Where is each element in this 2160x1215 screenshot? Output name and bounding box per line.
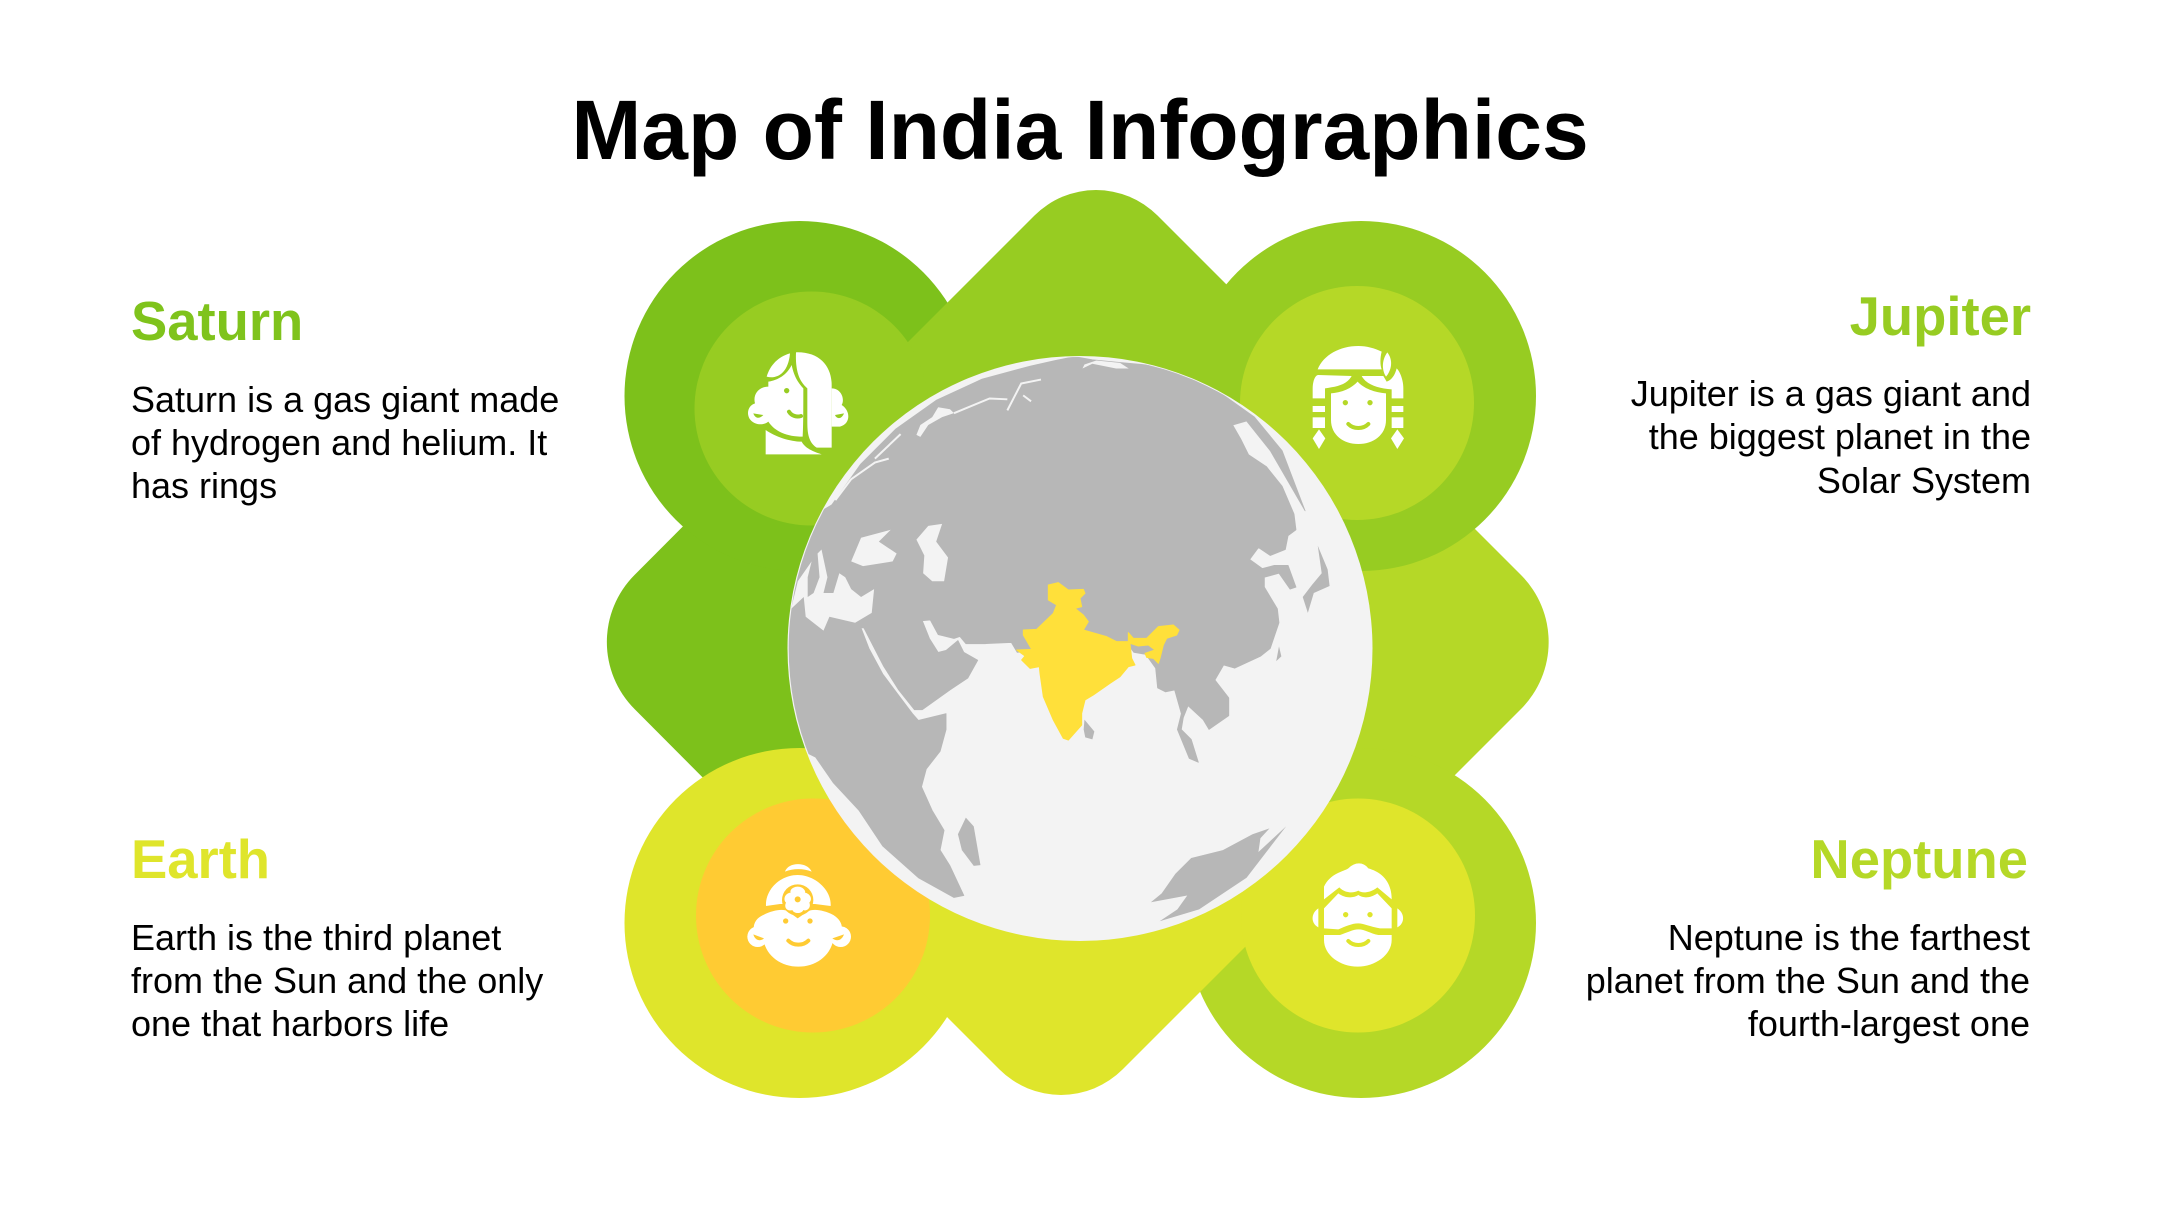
text block: Jupiter description: Jupiter is a gas giant and [1631,373,2031,414]
Australia [1151,826,1286,921]
text block: Saturn description [131,379,559,506]
inner circle: bottom-right [1241,798,1475,1032]
inner circle: top-left [694,292,928,526]
Mediterranean Sea [791,550,874,631]
icon: woman with braids [1313,346,1404,449]
inner circle: bottom-left [696,798,930,1032]
text block: Saturn description: Saturn is a gas giant made [131,379,559,420]
text block: Neptune description: Neptune is the farthest [1668,917,2030,958]
panel: Neptune text [1586,829,2030,1044]
text block: Saturn description: of hydrogen and helium. It [131,422,547,463]
Madagascar [958,818,980,866]
Black Sea [851,530,897,566]
heading: Earth: Earth [131,829,270,890]
text block: Earth description [131,917,543,1044]
title: Map of India Infographics [571,83,1589,177]
text block: Neptune description: planet from the Sun and the [1586,960,2030,1001]
panel: Earth text [131,829,543,1044]
panel: Jupiter text [1631,286,2031,501]
text block: Earth description: one that harbors life [131,1003,449,1044]
Japan [1303,546,1330,613]
icon: woman with long hair [748,352,848,454]
India highlighted [1017,583,1179,740]
text block: Earth description: Earth is the third planet [131,917,501,958]
Arctic coast veins [835,380,1041,500]
heading: Saturn: Saturn [131,291,303,352]
clover background shape [607,190,1549,1098]
Taiwan [1276,646,1281,661]
heading: Neptune: Neptune [1810,829,2028,890]
text block: Neptune description: fourth-largest one [1748,1003,2030,1044]
panel: Saturn text [131,291,559,506]
right petal [1080,454,1549,830]
top-right ring [1186,221,1536,571]
ocean [788,356,1372,941]
top-left ring [624,221,974,571]
bottom-left ring [624,748,974,1098]
icon: child with flower crown [747,864,851,967]
text block: Jupiter description: the biggest planet in the [1649,416,2031,457]
icon: bearded man [1313,863,1403,967]
text block: Jupiter description: Solar System [1817,460,2031,501]
inner circle: top-right [1240,286,1474,520]
text block: Neptune description [1586,917,2030,1044]
globe [780,356,1372,941]
Arctic coast marks [916,361,1129,437]
bottom-right ring [1186,748,1536,1098]
heading: Jupiter: Jupiter [1850,286,2031,347]
land masses [780,357,1330,921]
Sri Lanka [1084,720,1094,739]
left petal [607,429,1080,825]
top petal [860,190,1295,648]
text block: Saturn description: has rings [131,465,277,506]
Caspian Sea [916,524,948,581]
text block: Jupiter description [1631,373,2031,501]
text block: Earth description: from the Sun and the only [131,960,543,1001]
bottom petal [850,648,1270,1095]
